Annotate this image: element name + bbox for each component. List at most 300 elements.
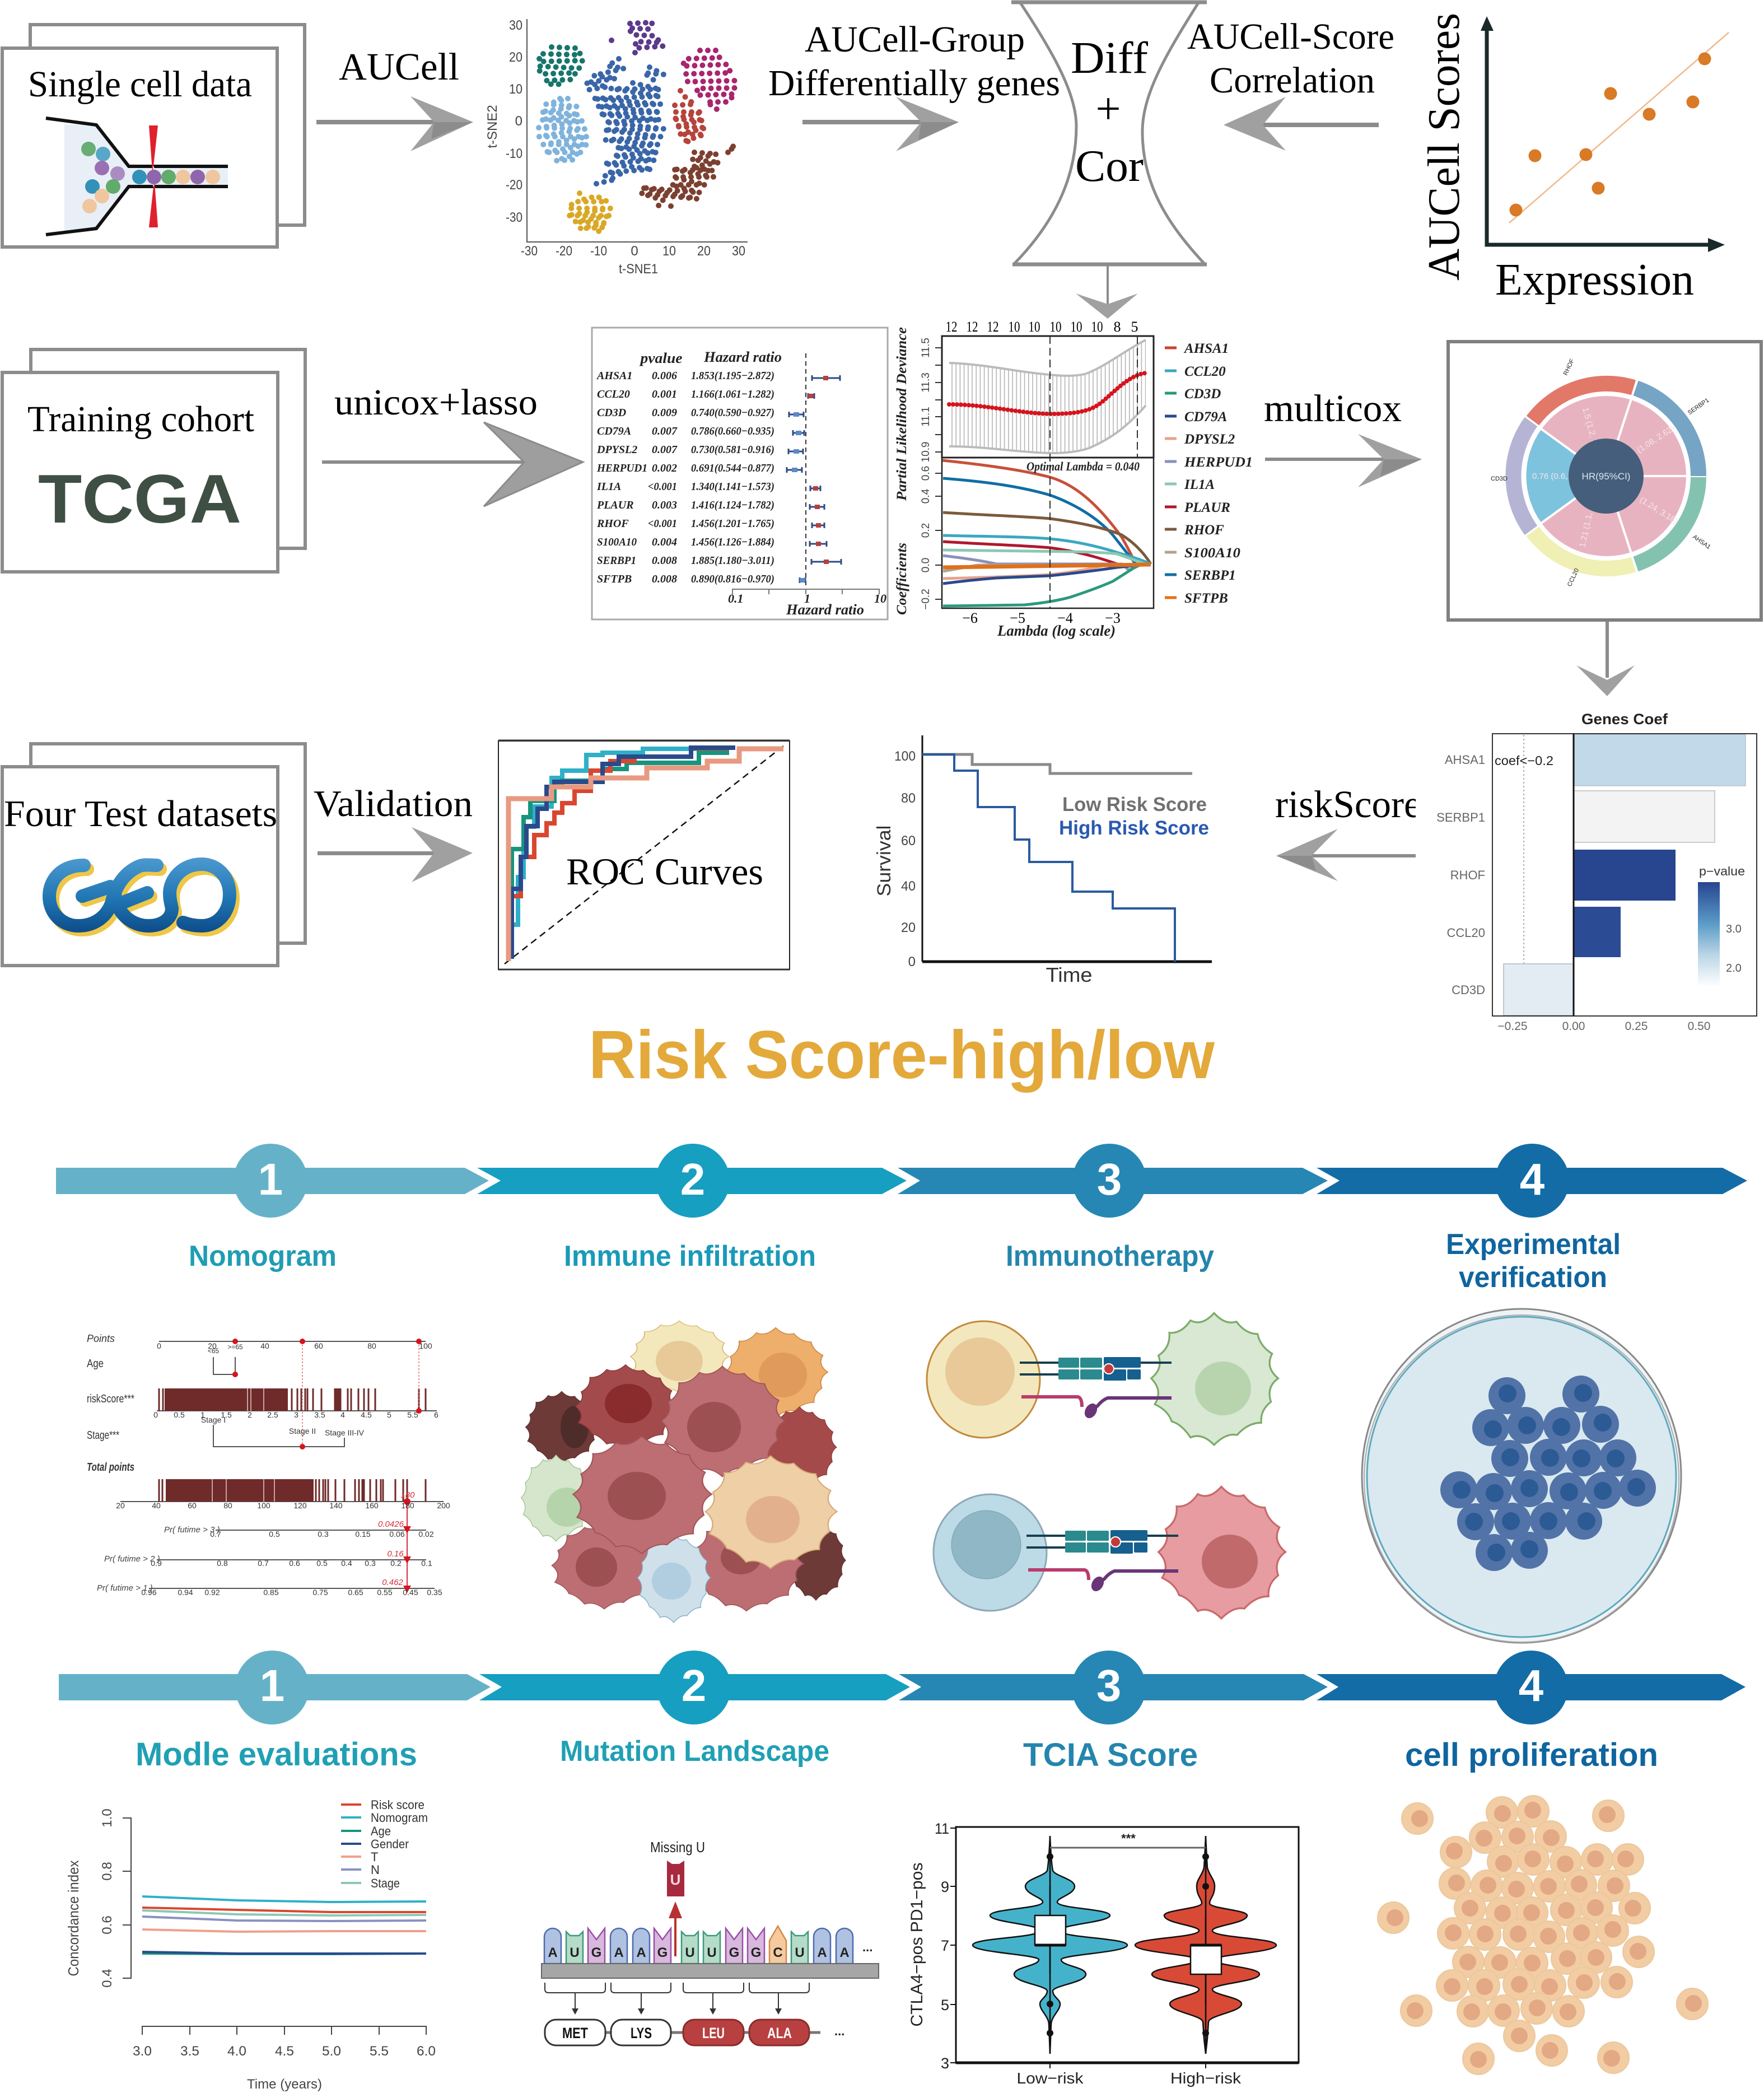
chart: nomogram: Stage*** [87, 1429, 119, 1442]
legend: gene names: IL1A [1184, 477, 1215, 492]
chart: concordance index lines: 0.4 [100, 1969, 115, 1988]
illustration: immunotherapy tumour cell pair [934, 1486, 1285, 1619]
amino acid pills: ... [834, 2024, 844, 2038]
chart: nomogram: 0.0426 [378, 1519, 404, 1529]
panel: lasso cross validation and coefficient paths: 11.3 [920, 372, 932, 393]
arrow: GEO to ROC [318, 827, 473, 882]
label: riskScore: riskScore [1275, 783, 1421, 826]
illustration: frameshift mutation: U [685, 1945, 695, 1960]
panel: Diff + Cor: Diff [1071, 34, 1148, 83]
chart: nomogram: Points [87, 1333, 115, 1344]
panel: multivariate Cox circular forest: CCL20 [1566, 567, 1580, 588]
chart: t-SNE clusters: 30 [732, 244, 745, 259]
panel: univariate Cox forest plot: IL1A [596, 481, 621, 493]
chart: nomogram: 80 [367, 1341, 376, 1350]
chart: AUCell score vs expression scatter [1420, 13, 1729, 305]
chart: nomogram: 160 [365, 1501, 379, 1510]
heading: Immune infiltration: Immune infiltration [564, 1240, 816, 1272]
chart: TCIA violin plot: 11 [935, 1820, 949, 1837]
violin: high risk [1135, 1836, 1276, 2054]
chart: nomogram: 20 [208, 1341, 217, 1350]
chart: nomogram: Pr( futime > 3 ) [164, 1525, 220, 1535]
chart: nomogram: 0.8 [217, 1559, 228, 1568]
legend: p-value color bar [1698, 864, 1745, 987]
chart: t-SNE clusters: -20 [506, 178, 522, 193]
chart: survival curves: Survival [874, 826, 895, 896]
panel: lasso cross validation and coefficient paths: 5 [1131, 319, 1138, 335]
chart: nomogram: 4.5 [361, 1410, 372, 1419]
legend: concordance lines: Nomogram [371, 1811, 428, 1825]
chart: TCIA violin plot: 7 [941, 1937, 949, 1954]
panel: univariate Cox forest plot: 0.008 [652, 573, 677, 585]
chart: TCIA violin plot: CTLA4−pos PD1−pos [908, 1863, 926, 2026]
chart: TCIA violin plot: 3 [941, 2055, 949, 2072]
label: AUCell-Group differentially genes: Differentially genes [768, 63, 1060, 104]
chart: t-SNE clusters: 10 [509, 82, 522, 97]
chart: nomogram: 2 [248, 1410, 252, 1419]
illustration: frameshift mutation: G [657, 1945, 668, 1960]
panel: univariate Cox forest plot: 0.691(0.544−0.877) [691, 462, 774, 474]
amino acid pills: MET [562, 2025, 588, 2041]
panel: lasso cross validation and coefficient paths: −0.2 [920, 589, 932, 610]
band: first timeline: 2 [680, 1154, 705, 1204]
panel: univariate Cox forest plot: 1.853(1.195−2.872) [691, 370, 774, 382]
chart: nomogram: 80 [223, 1501, 232, 1510]
illustration: frameshift mutation: U [795, 1945, 805, 1960]
heading: Mutation Landscape: Mutation Landscape [560, 1735, 829, 1768]
legend: gene names: CD3D [1184, 386, 1221, 402]
chart: nomogram: 0.7 [258, 1559, 269, 1568]
card: single cell data [2, 25, 305, 247]
chart: genes coefficient bars: Genes Coef [1581, 711, 1668, 728]
panel: univariate Cox forest plot: 1 [804, 591, 810, 605]
band: first timeline: 4 [1520, 1154, 1545, 1204]
chart: survival curves: 20 [901, 920, 916, 935]
panel: univariate Cox forest plot: 0.740(0.590−0.927) [691, 407, 774, 419]
heading: cell proliferation: cell proliferation [1405, 1737, 1658, 1773]
heading: Immunotherapy: Immunotherapy [1006, 1240, 1214, 1272]
amino acid pills [545, 2020, 844, 2045]
panel: univariate Cox forest plot: SFTPB [597, 573, 632, 585]
chart: genes coefficient bars: CCL20 [1447, 926, 1485, 940]
legend: concordance lines: Risk score [371, 1798, 424, 1812]
illustration: frameshift mutation: A [636, 1945, 646, 1960]
chart: concordance index lines [65, 1798, 436, 2092]
label: AUCell-Score correlation [1187, 16, 1394, 101]
card: training cohort TCGA [2, 349, 305, 572]
panel: multivariate Cox circular forest: 0.76 (0.6, 0.9) [1532, 472, 1584, 481]
panel: univariate Cox forest plot: <0.001 [648, 481, 677, 493]
legend: gene names: AHSA1 [1183, 341, 1229, 356]
icon: microfluidic funnel with cells [46, 118, 228, 235]
chart: survival curves: 60 [901, 833, 916, 849]
chart: TCIA violin plot: 9 [941, 1878, 949, 1895]
receptor complex [1020, 1357, 1172, 1420]
panel: multivariate Cox circular forest: RHOF [1562, 358, 1576, 376]
axis label: Expression: Expression [1495, 255, 1694, 305]
panel: lasso cross validation and coefficient paths: Optimal Lambda = 0.040 [1026, 459, 1140, 473]
panel: multivariate Cox circular forest: AHSA1 [1691, 534, 1712, 551]
panel: multivariate Cox circular forest: 1.21 (1.1, 1.4) [1578, 495, 1598, 548]
panel: univariate Cox forest plot: PLAUR [596, 499, 634, 511]
legend: gene names: RHOF [1184, 523, 1224, 538]
chart: nomogram: 0.1 [421, 1559, 432, 1568]
panel: multivariate Cox circular forest: (1.24, 3.18) [1638, 495, 1679, 526]
title: Risk Score-high/low: Risk Score-high/low [589, 1017, 1215, 1093]
band: first timeline [56, 1144, 1747, 1218]
legend: gene names: S100A10 [1184, 546, 1241, 561]
panel: multivariate Cox circular forest: (1.08, 2.62) [1635, 423, 1677, 455]
panel: lasso cross validation and coefficient paths: −5 [1010, 610, 1025, 626]
chart: nomogram: Pr( futime > 2 ) [104, 1554, 160, 1564]
illustration: frameshift mutation: G [729, 1945, 739, 1960]
chart: concordance index lines: 3.0 [133, 2044, 152, 2059]
band: second timeline: 1 [260, 1661, 284, 1710]
chart: nomogram: 0.6 [289, 1559, 300, 1568]
illustration: frameshift mutation: A [817, 1945, 827, 1960]
chart: concordance index lines: 1.0 [100, 1808, 115, 1828]
chart: nomogram: Pr( futime > 1 ) [97, 1583, 153, 1593]
logo: TCGA: TCGA [38, 461, 241, 538]
panel: univariate Cox forest plot: CD79A [597, 425, 631, 437]
panel: univariate Cox forest plot: Hazard ratio [703, 349, 782, 365]
arrow: pie to gene coefficients [1576, 622, 1635, 696]
panel: lasso cross validation and coefficient paths: 11.1 [920, 407, 932, 427]
chart: concordance index lines: Time (years) [247, 2077, 322, 2092]
legend: gene names: CD79A [1184, 409, 1227, 425]
receptor complex [1026, 1530, 1178, 1593]
label: unicox+lasso: unicox+lasso [334, 382, 538, 423]
label: AUCell-Group differentially genes [768, 19, 1060, 104]
arrow: training cohort to forest plot [322, 422, 583, 506]
panel: univariate Cox forest plot: 0.003 [652, 499, 677, 511]
chart: nomogram: 100 [419, 1341, 432, 1350]
chart: genes coefficient bars: −0.25 [1497, 1020, 1528, 1033]
chart: nomogram: 180 [401, 1501, 414, 1510]
chart: nomogram: 200 [437, 1501, 450, 1510]
panel: univariate Cox forest plot: Hazard ratio [786, 602, 864, 618]
chart: survival curves: 0 [908, 954, 916, 969]
amino acid pills: ALA [767, 2025, 792, 2041]
panel: Diff + Cor: Cor [1075, 142, 1144, 191]
panel: univariate Cox forest plot: 0.002 [652, 462, 677, 474]
panel: multivariate Cox circular forest [1448, 342, 1761, 620]
chart: coefficient paths [942, 460, 1151, 606]
panel: multivariate Cox circular forest: CD3D [1491, 476, 1508, 482]
panel: lasso cross validation and coefficient paths: 12 [945, 319, 958, 335]
legend: gene names [1165, 341, 1253, 606]
icon: missing U nucleotide: U [670, 1871, 680, 1888]
chart: concordance index lines: Concordance index [65, 1861, 82, 1976]
panel: univariate Cox forest plot: 1.456(1.126−1.884) [691, 536, 774, 548]
chart: nomogram: 140 [329, 1501, 343, 1510]
panel: univariate Cox forest plot: 0.1 [728, 591, 744, 605]
chart: nomogram: riskScore*** [87, 1393, 134, 1405]
panel: univariate Cox forest plot: 0.001 [652, 388, 677, 400]
chart: t-SNE clusters: t-SNE1 [619, 262, 658, 277]
illustration: frameshift mutation: A [839, 1945, 850, 1960]
panel: lasso cross validation and coefficient paths [894, 319, 1253, 639]
illustration: immune infiltration cell cluster [521, 1321, 846, 1623]
panel: lasso cross validation and coefficient paths: 12 [967, 319, 978, 335]
heading: Modle evaluations: Modle evaluations [136, 1736, 417, 1773]
panel: univariate Cox forest plot: HERPUD1 [596, 462, 647, 474]
chart: nomogram: 0.4 [341, 1559, 352, 1568]
chart: nomogram: 0.45 [403, 1588, 418, 1597]
panel: univariate Cox forest plot: 1.456(1.201−1.765) [691, 518, 774, 530]
arrow: coefficients to survival [1276, 829, 1416, 881]
amino acid pills: LYS [631, 2025, 652, 2041]
legend: gene names: CCL20 [1184, 364, 1226, 379]
label: AUCell-Group differentially genes: AUCell-Group [805, 19, 1025, 60]
label: multicox: multicox [1264, 387, 1402, 430]
legend: low risk score: Low Risk Score [1062, 794, 1207, 815]
label: Missing U: Missing U [650, 1839, 705, 1856]
illustration: frameshift mutation: ... [862, 1940, 872, 1954]
heading: TCIA Score: TCIA Score [1023, 1737, 1198, 1773]
panel: lasso cross validation and coefficient paths: −3 [1105, 610, 1121, 626]
chart: nomogram: 0.9 [151, 1559, 162, 1568]
chart: concordance index lines: 6.0 [417, 2044, 436, 2059]
label: Validation: Validation [314, 783, 473, 824]
chart: nomogram: >=65 [227, 1343, 243, 1351]
chart: nomogram: 0.16 [387, 1549, 404, 1559]
chart: concordance index lines: 0.6 [100, 1915, 115, 1934]
chart: nomogram: 120 [293, 1501, 307, 1510]
legend: concordance lines: Stage [371, 1876, 400, 1890]
illustration: petri dish with cells [1362, 1309, 1681, 1643]
panel: lasso cross validation and coefficient paths: 10 [1071, 319, 1082, 335]
chart: concordance index lines: 3.5 [180, 2044, 199, 2059]
band: second timeline: 2 [682, 1661, 706, 1710]
heading: Four Test datasets: Four Test datasets [4, 793, 277, 835]
chart: genes coefficient bars: 0.25 [1625, 1020, 1648, 1033]
panel: Diff + Cor: + [1095, 85, 1121, 134]
chart: survival curves: 80 [901, 791, 916, 806]
panel: univariate Cox forest plot: AHSA1 [596, 370, 632, 382]
chart: nomogram: 0.5 [316, 1559, 328, 1568]
arrow: nucleotide removed [669, 1901, 682, 1956]
chart: nomogram: <65 [208, 1347, 220, 1355]
panel: lasso cross validation and coefficient paths: 0.2 [920, 523, 932, 538]
panel: lasso cross validation and coefficient paths: 10 [1008, 319, 1020, 335]
chart: t-SNE clusters: -30 [521, 244, 538, 259]
chart: TCIA violin plot: 5 [941, 1997, 949, 2013]
chart: concordance index lines: 0.8 [100, 1862, 115, 1881]
chart: nomogram: 0.5 [174, 1410, 185, 1419]
panel: Diff + Cor [1011, 2, 1207, 264]
panel: univariate Cox forest plot: 0.890(0.816−0.970) [691, 573, 774, 585]
logo: GEO [49, 864, 233, 930]
nucleotide row [544, 1926, 853, 1964]
legend: gene names: PLAUR [1184, 500, 1230, 515]
panel: lasso cross validation and coefficient paths: 0.6 [920, 466, 932, 481]
chart: survival curves: 40 [901, 879, 916, 894]
chart: nomogram: 0.06 [389, 1530, 405, 1539]
arrow: cell data to t-SNE [316, 96, 473, 151]
chart: nomogram: 40 [152, 1501, 161, 1510]
amino acid pills: LEU [702, 2025, 725, 2041]
chart: t-SNE clusters: 30 [509, 18, 522, 33]
illustration: frameshift mutation [542, 1839, 879, 2045]
chart: t-SNE clusters: -30 [506, 210, 522, 225]
band: second timeline [59, 1651, 1746, 1724]
band: second timeline: 3 [1096, 1661, 1121, 1710]
panel: univariate Cox forest plot: 0.730(0.581−0.916) [691, 444, 774, 456]
heading: Experimental verification [1446, 1228, 1621, 1294]
chart: TCIA violin plot: Low−risk [1017, 2069, 1084, 2087]
chart: TCIA violin plot: *** [1121, 1831, 1136, 1845]
chart: TCIA violin plot: High−risk [1170, 2069, 1242, 2087]
arrow: t-SNE to Diff [802, 97, 959, 151]
legend: concordance lines: T [371, 1850, 378, 1864]
panel: univariate Cox forest plot: 1.340(1.141−1.573) [691, 481, 774, 493]
chart: nomogram: 60 [188, 1501, 197, 1510]
chart: genes coefficient bars: RHOF [1450, 868, 1485, 882]
panel: multivariate Cox circular forest: 1.5 (1.2, 2.1) [1580, 407, 1602, 455]
band: first timeline: 1 [258, 1154, 283, 1204]
illustration: frameshift mutation: C [773, 1945, 783, 1960]
chart: genes coefficient bars: CD3D [1452, 983, 1485, 997]
chart: nomogram: 20 [116, 1501, 125, 1510]
panel: lasso cross validation and coefficient paths: 10 [1049, 319, 1062, 335]
band: second timeline: 4 [1519, 1661, 1544, 1710]
violin: low risk [973, 1836, 1127, 2054]
panel: lasso cross validation and coefficient paths: −4 [1057, 610, 1073, 626]
panel: lasso cross validation and coefficient paths: 8 [1113, 319, 1121, 335]
chart: nomogram [87, 1333, 450, 1597]
arrow: Diff down to lasso [1076, 264, 1138, 319]
label: AUCell-Score correlation: AUCell-Score [1187, 16, 1394, 57]
panel: multivariate Cox circular forest: SERBP1 [1687, 397, 1710, 416]
panel: univariate Cox forest plot: 0.004 [652, 536, 677, 548]
label: AUCell-Score correlation: Correlation [1210, 60, 1375, 101]
chart: survival curves [874, 735, 1212, 986]
chart: ROC curves [498, 740, 790, 969]
chart: lasso CV curve [949, 340, 1146, 453]
chart: t-SNE clusters: t-SNE2 [485, 105, 500, 148]
chart: nomogram: 0.92 [204, 1588, 220, 1597]
legend: concordance lines: Age [371, 1824, 391, 1838]
chart: nomogram: 180 [400, 1490, 415, 1500]
chart: t-SNE clusters: 0 [631, 244, 638, 259]
chart: nomogram: 0.3 [318, 1530, 329, 1539]
legend: concordance lines: N [371, 1863, 380, 1877]
panel: univariate Cox forest plot: CD3D [597, 407, 626, 419]
heading: Experimental verification: verification [1459, 1261, 1607, 1294]
chart: nomogram: 0.02 [418, 1530, 434, 1539]
axis label: Partial Likelihood Deviance: Partial Likelihood Deviance [894, 327, 909, 501]
chart: nomogram: 60 [314, 1341, 323, 1350]
chart: nomogram: Age [87, 1358, 104, 1370]
illustration: frameshift mutation: G [591, 1945, 601, 1960]
chart: nomogram: 5 [387, 1410, 391, 1419]
panel: lasso cross validation and coefficient paths: Lambda (log scale) [997, 622, 1116, 639]
legend: p-value color bar: 2.0 [1726, 962, 1742, 975]
legend: p-value color bar: 3.0 [1726, 923, 1742, 935]
chart: genes coefficient bars: 0.00 [1562, 1020, 1585, 1033]
chart: genes coefficient bars: AHSA1 [1445, 753, 1485, 767]
chart: concordance index lines: 4.0 [227, 2044, 246, 2059]
illustration: frameshift mutation: G [751, 1945, 761, 1960]
illustration: frameshift mutation: U [707, 1945, 717, 1960]
arrow: correlation to Diff [1224, 97, 1379, 151]
legend: high risk score: High Risk Score [1059, 817, 1209, 839]
panel: univariate Cox forest plot: 1.166(1.061−1.282) [691, 388, 774, 400]
chart: survival curves: 100 [894, 749, 916, 764]
axis label: Coefficients: Coefficients [894, 543, 909, 615]
chart: genes coefficient bars: coef<−0.2 [1495, 753, 1553, 768]
panel: univariate Cox forest plot: 1.885(1.180−3.011) [691, 554, 774, 567]
panel: univariate Cox forest plot: 0.007 [652, 425, 678, 437]
panel: univariate Cox forest plot [592, 328, 888, 619]
heading: single cell data: Single cell data [28, 64, 252, 105]
panel: univariate Cox forest plot: 10 [874, 591, 886, 605]
chart: t-SNE clusters [485, 18, 748, 277]
chart: t-SNE clusters: 20 [509, 50, 522, 65]
label: AUCell: AUCell [339, 45, 459, 88]
panel: lasso cross validation and coefficient paths: 0.4 [920, 488, 932, 504]
chart: nomogram: 5.5 [407, 1410, 418, 1419]
legend: concordance lines [341, 1798, 428, 1890]
chart: nomogram: Stage II [289, 1427, 316, 1435]
card: four test datasets GEO [2, 744, 305, 966]
panel: univariate Cox forest plot: 0.008 [652, 554, 677, 567]
chart: nomogram: 0.96 [141, 1588, 157, 1597]
chart: nomogram: Stage I [201, 1415, 226, 1424]
panel: lasso cross validation and coefficient paths: 12 [987, 319, 999, 335]
panel: univariate Cox forest plot: SERBP1 [597, 554, 636, 567]
chart: t-SNE clusters: 20 [697, 244, 711, 259]
illustration: frameshift mutation: A [548, 1945, 558, 1960]
panel: univariate Cox forest plot: 0.006 [652, 370, 677, 382]
panel: multivariate Cox circular forest: HR(95%CI) [1582, 471, 1630, 482]
panel: lasso cross validation and coefficient paths: −6 [962, 610, 978, 626]
panel: lasso cross validation and coefficient paths: 10.9 [920, 442, 932, 462]
heading: Training cohort: Training cohort [27, 399, 254, 440]
chart: nomogram: 100 [257, 1501, 270, 1510]
chart: nomogram: Stage III-IV [325, 1428, 365, 1437]
chart: concordance index lines: 4.5 [275, 2044, 294, 2059]
panel: univariate Cox forest plot: CCL20 [597, 388, 630, 400]
panel: univariate Cox forest plot: 0.786(0.660−0.935) [691, 425, 774, 437]
heading: Experimental verification: Experimental [1446, 1228, 1621, 1261]
chart: t-SNE clusters: -10 [506, 146, 522, 161]
illustration: cell proliferation [1378, 1796, 1708, 2075]
panel: univariate Cox forest plot: RHOF [596, 518, 629, 530]
chart: nomogram: 0.15 [355, 1530, 371, 1539]
panel: univariate Cox forest plot: S100A10 [597, 536, 637, 548]
chart: nomogram: 1 [200, 1410, 205, 1419]
chart: nomogram: 40 [260, 1341, 269, 1350]
chart: nomogram: 0 [153, 1410, 158, 1419]
chart: genes coefficient bars: SERBP1 [1436, 810, 1485, 824]
chart: nomogram: 0.55 [377, 1588, 393, 1597]
chart: nomogram: 0 [157, 1341, 161, 1350]
chart: t-SNE clusters: -20 [556, 244, 572, 259]
icon: missing U nucleotide [667, 1861, 684, 1896]
legend: gene names: DPYSL2 [1184, 432, 1235, 447]
chart: nomogram: 3.5 [314, 1410, 325, 1419]
legend: gene names: SFTPB [1184, 591, 1228, 606]
chart: concordance index lines: 5.5 [370, 2044, 389, 2059]
chart: nomogram: 0.3 [365, 1559, 376, 1568]
chart: nomogram: 0.462 [382, 1578, 403, 1587]
chart: nomogram: 0.2 [390, 1559, 402, 1568]
chart: nomogram: 1.5 [221, 1410, 232, 1419]
panel: lasso cross validation and coefficient paths: 10 [1028, 319, 1040, 335]
illustration: frameshift mutation: A [614, 1945, 624, 1960]
